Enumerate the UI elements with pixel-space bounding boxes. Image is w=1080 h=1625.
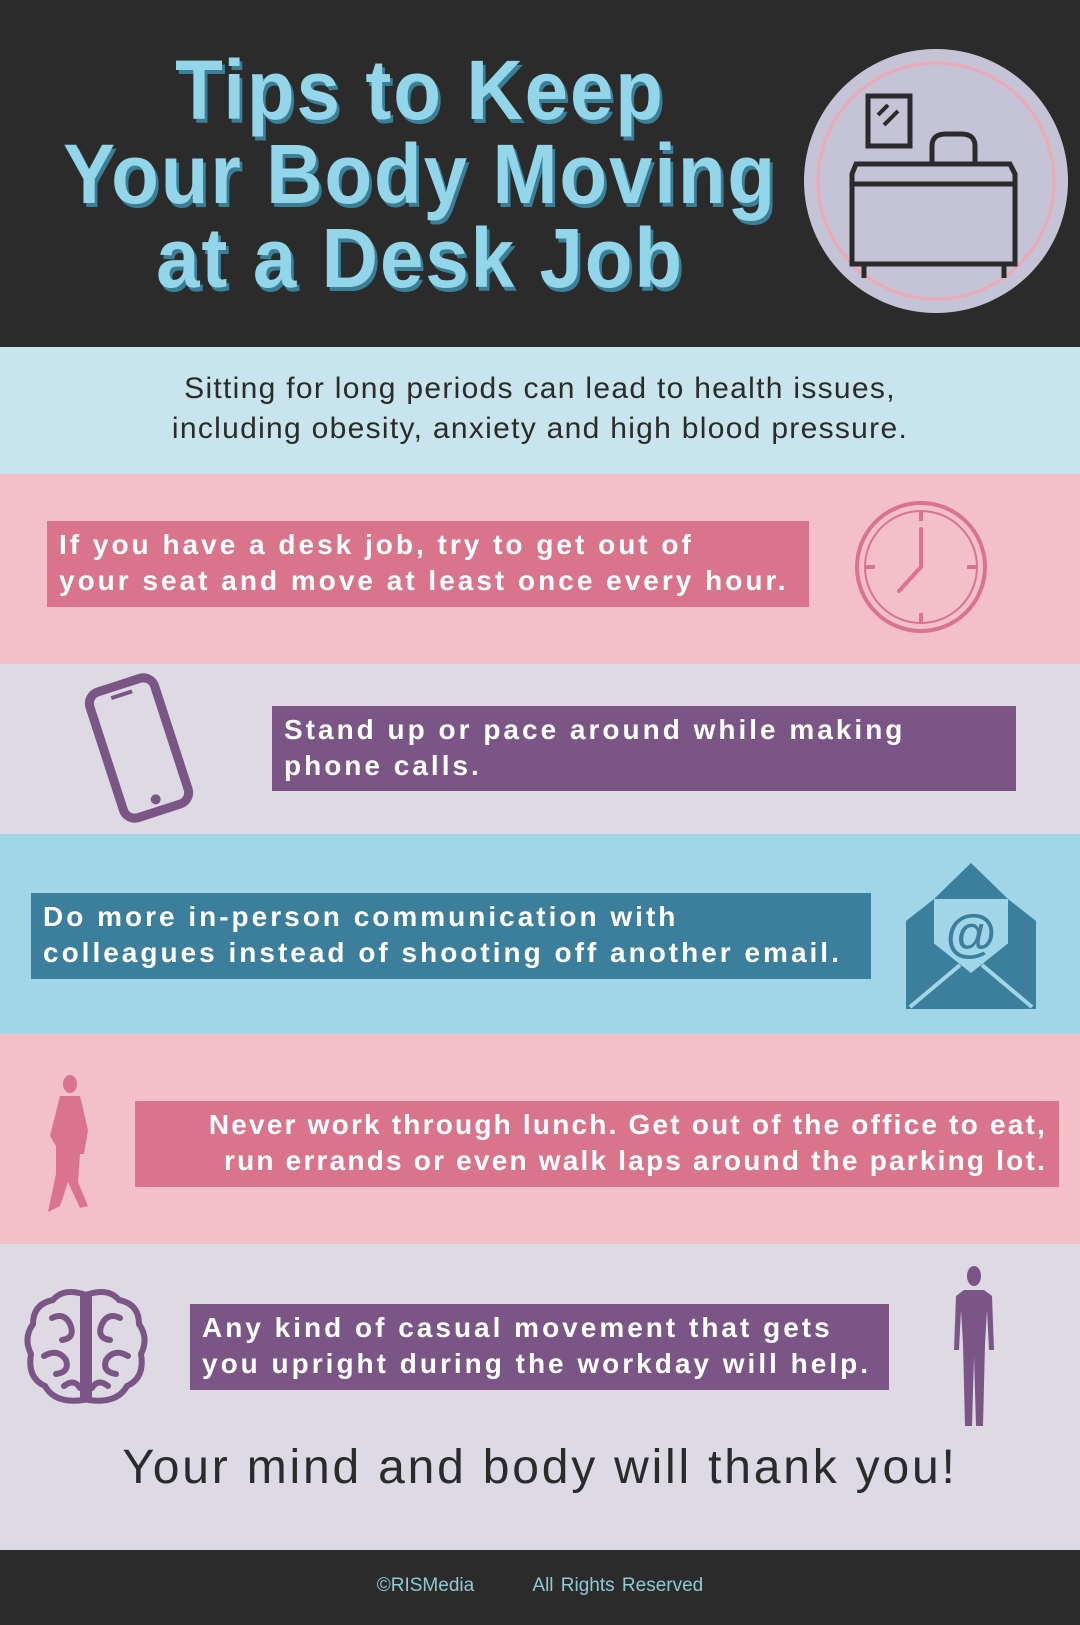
- icon: brain: [24, 1289, 148, 1404]
- icon: desk circle: [804, 49, 1068, 313]
- title: at a Desk Job: [156, 211, 684, 305]
- title: Your Body Moving: [63, 127, 777, 221]
- icon: walking person: [48, 1075, 88, 1212]
- tip box 2: phone calls.: [284, 750, 482, 781]
- title: Tips to Keep: [175, 43, 665, 137]
- icon: clock: [855, 501, 987, 633]
- tip box 1: your seat and move at least once every hour.: [59, 565, 789, 596]
- tip box 3: [31, 893, 871, 979]
- tip box 5: Any kind of casual movement that gets: [202, 1312, 833, 1343]
- icon: envelope: @: [946, 905, 996, 963]
- icon: phone: [84, 673, 194, 823]
- intro text: [172, 372, 908, 445]
- band 2: phone calls: [0, 664, 1080, 834]
- band 4: lunch: [0, 1034, 1080, 1244]
- tip box 2: Stand up or pace around while making: [284, 714, 905, 745]
- header band: [0, 0, 1080, 347]
- tip box 3: Do more in-person communication with: [43, 901, 678, 932]
- tip box 2: [272, 706, 1016, 791]
- footer: [0, 1550, 1080, 1625]
- tip box 5: you upright during the workday will help.: [202, 1348, 871, 1379]
- tip box 3: colleagues instead of shooting off another email.: [43, 937, 842, 968]
- closing text: Your mind and body will thank you!: [122, 1441, 958, 1494]
- band 5: casual movement: [0, 1244, 1080, 1550]
- band 3: email: [0, 834, 1080, 1034]
- tip box 5: [190, 1304, 889, 1390]
- tip box 1: [47, 521, 809, 607]
- footer text: ©RISMedia All Rights Reserved: [377, 1575, 703, 1596]
- tip box 4: [135, 1101, 1059, 1187]
- title: [63, 43, 777, 305]
- intro text: Sitting for long periods can lead to health issues,: [184, 372, 896, 405]
- icon: standing person: [954, 1266, 994, 1426]
- icon: envelope: [906, 863, 1036, 1009]
- intro band: [0, 347, 1080, 474]
- intro text: including obesity, anxiety and high blood pressure.: [172, 412, 908, 445]
- band 1: hourly: [0, 474, 1080, 664]
- tip box 4: Never work through lunch. Get out of the office to eat,: [209, 1109, 1047, 1140]
- tip box 4: run errands or even walk laps around the parking lot.: [224, 1145, 1047, 1176]
- tip box 1: If you have a desk job, try to get out of: [59, 529, 694, 560]
